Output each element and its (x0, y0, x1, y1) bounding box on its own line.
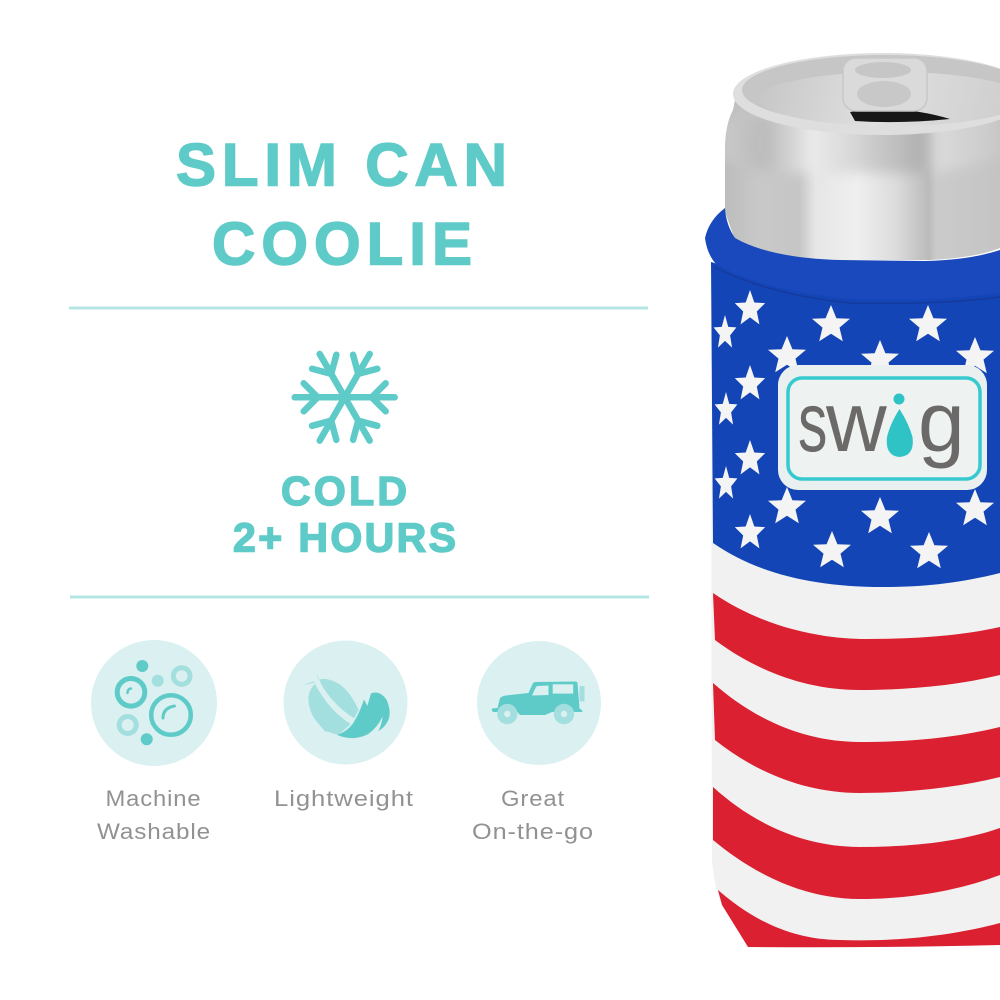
red stripes (713, 593, 1000, 947)
label: machine washable: Machine (106, 786, 202, 811)
feature: machine washable (91, 640, 217, 844)
blue star field (711, 262, 1000, 587)
product: can in coolie (705, 53, 1000, 947)
swig logo wordmark: i (894, 405, 906, 463)
stars (714, 290, 994, 568)
icon: feather (284, 640, 408, 764)
title: COOLIE (212, 210, 472, 278)
icon: jeep (477, 641, 601, 765)
cold rating text (233, 468, 456, 560)
icon: snowflake (295, 347, 395, 448)
cold rating text: COLD (281, 468, 407, 514)
swig logo wordmark: w (825, 375, 887, 469)
coolie sleeve (705, 208, 1000, 947)
feature: lightweight (274, 640, 414, 811)
swig logo wordmark (798, 375, 965, 470)
label: great on-the-go (472, 786, 594, 844)
swig logo wordmark: g (918, 375, 965, 469)
icon: bubbles (91, 640, 217, 766)
rolled collar (705, 208, 1000, 300)
logo water drop (887, 394, 913, 457)
label: great on-the-go: On-the-go (472, 819, 594, 844)
label: machine washable: Washable (97, 819, 211, 844)
label: great on-the-go: Great (501, 786, 565, 811)
swig logo patch (778, 365, 987, 490)
cold rating text: 2+ HOURS (233, 514, 456, 560)
swig logo wordmark: s (798, 376, 827, 470)
feature: great on-the-go (472, 641, 601, 844)
aluminium can (720, 53, 1000, 260)
label: lightweight: Lightweight (274, 786, 414, 811)
title (176, 132, 507, 278)
title: SLIM CAN (176, 132, 507, 198)
label: machine washable (97, 786, 211, 844)
